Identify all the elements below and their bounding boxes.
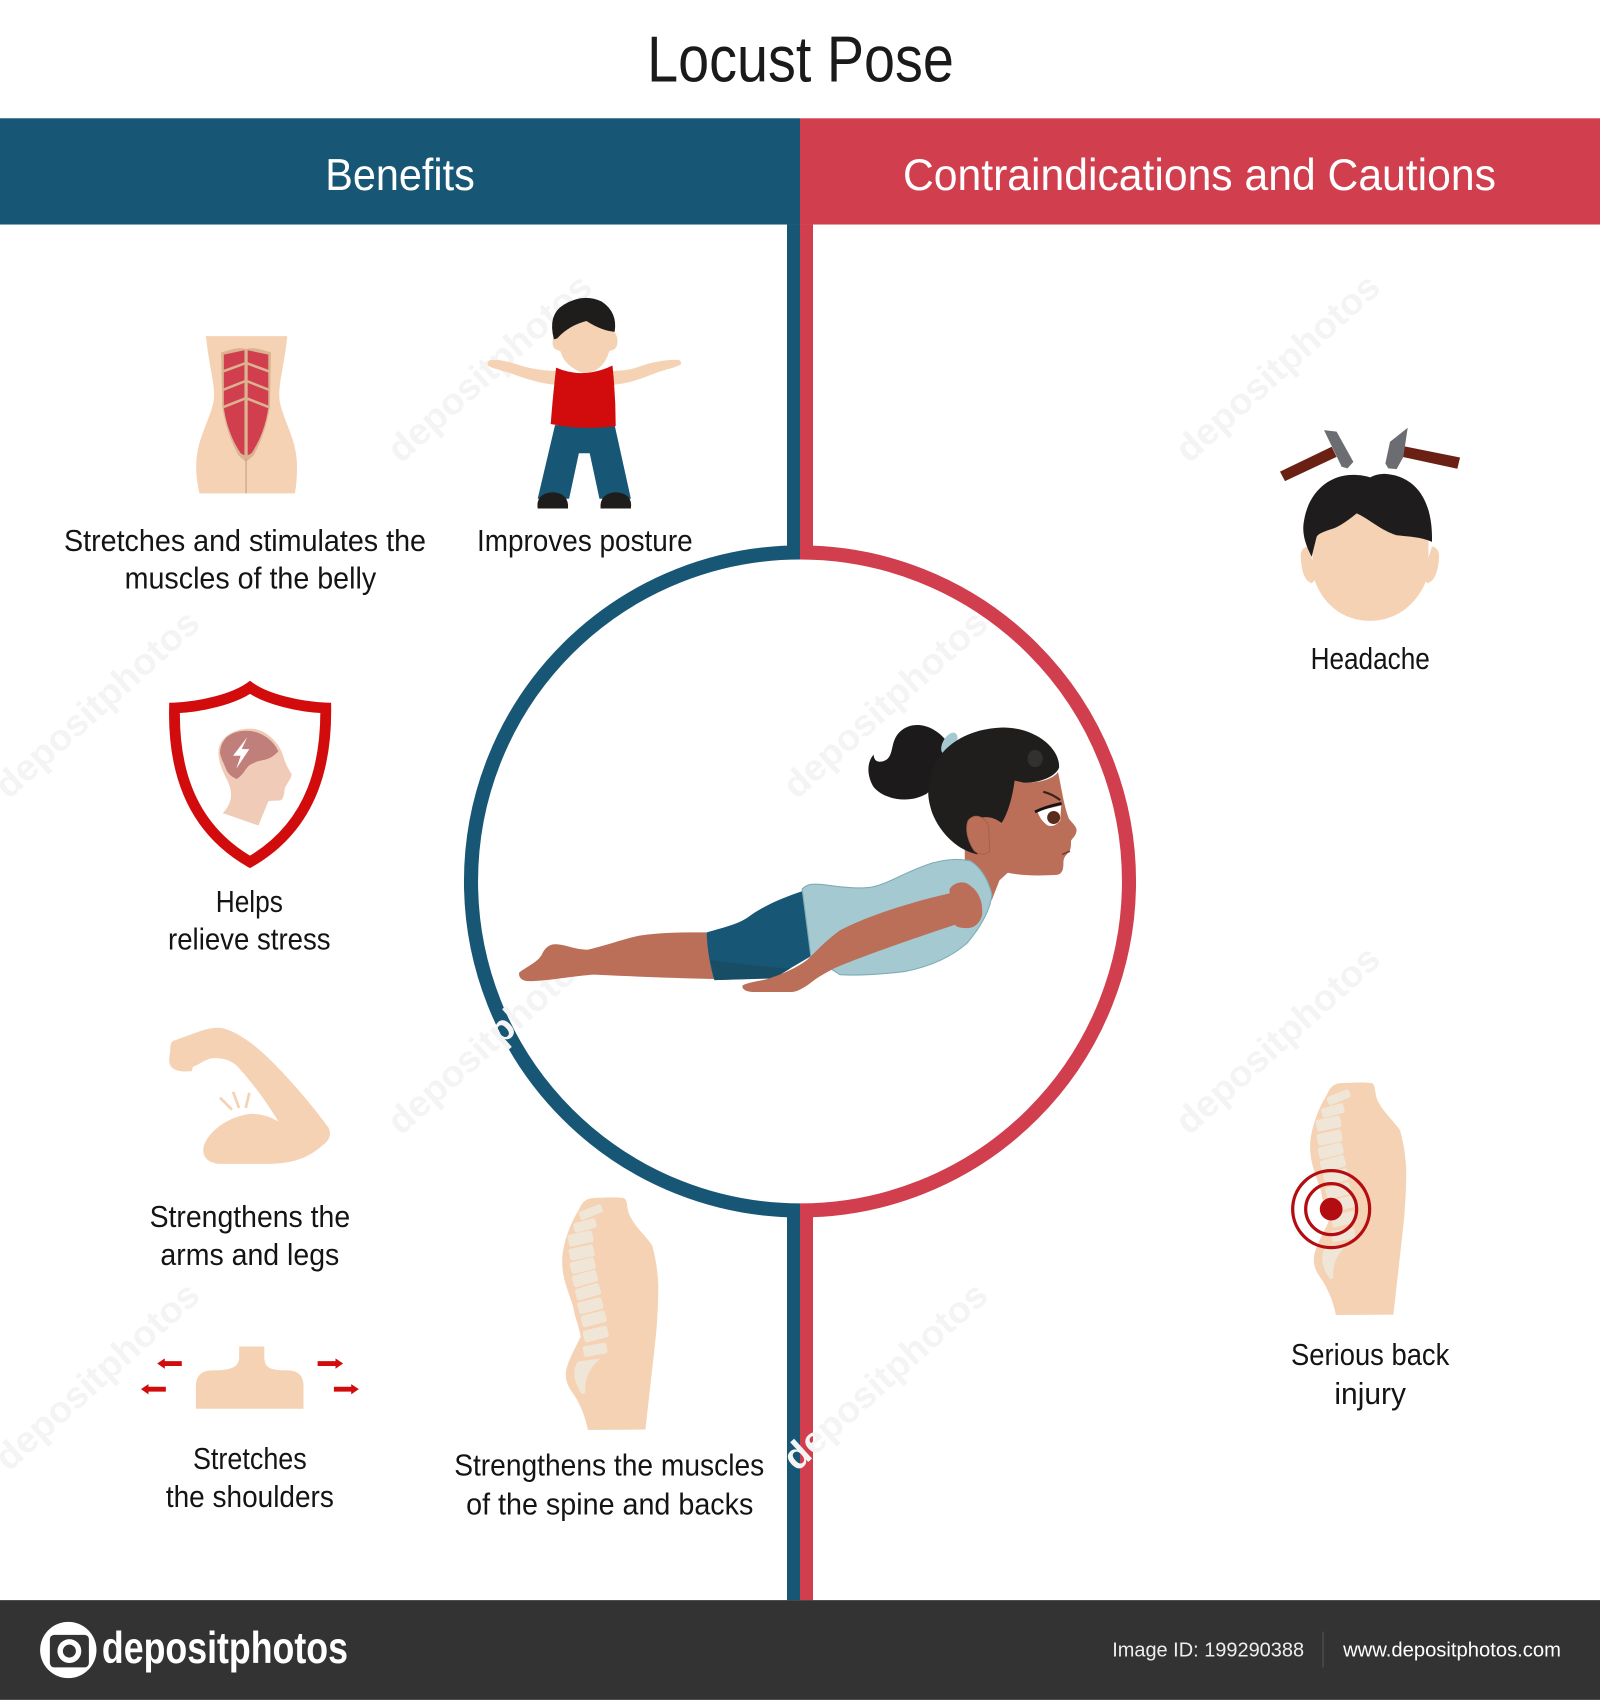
watermark: depositphotos bbox=[775, 602, 995, 806]
watermark: depositphotos bbox=[1167, 938, 1388, 1142]
footer bar bbox=[0, 1600, 1600, 1700]
label: shoulders: Stretches bbox=[193, 1443, 307, 1476]
label: arms and legs bbox=[150, 1201, 350, 1272]
panel header: benefits bbox=[0, 118, 800, 225]
panel header: contraindications and cautions bbox=[800, 118, 1600, 225]
illustration: girl in locust pose bbox=[519, 725, 1077, 992]
image id: Image ID: 199290388 bbox=[1112, 1639, 1304, 1662]
watermark bbox=[0, 265, 1388, 1478]
logo: depositphotos bbox=[40, 1622, 348, 1678]
icon: headache bbox=[1280, 428, 1460, 621]
label: headache: Headache bbox=[1311, 643, 1430, 676]
title: Locust Pose bbox=[647, 22, 954, 95]
label: shoulders bbox=[166, 1443, 334, 1514]
icon: standing boy bbox=[488, 298, 681, 509]
label: stress: relieve stress bbox=[168, 924, 331, 957]
label: belly: muscles of the belly bbox=[125, 563, 377, 596]
icon: shoulders with arrows bbox=[141, 1346, 359, 1409]
label: stress bbox=[168, 886, 331, 957]
watermark: depositphotos bbox=[1167, 265, 1388, 470]
label: spine and backs bbox=[454, 1449, 764, 1521]
website: www.depositphotos.com bbox=[1342, 1639, 1561, 1662]
logo: depositphotos: depositphotos bbox=[102, 1624, 348, 1673]
label: stress: Helps bbox=[216, 886, 283, 919]
icon: abdominal muscles bbox=[196, 336, 297, 493]
label: back injury: Serious back bbox=[1291, 1339, 1450, 1372]
label: belly: Stretches and stimulates the bbox=[64, 525, 426, 558]
label: posture: Improves posture bbox=[477, 525, 693, 558]
label: belly bbox=[64, 525, 426, 596]
label: shoulders: the shoulders bbox=[166, 1481, 334, 1514]
panel header: benefits: Benefits bbox=[325, 151, 475, 200]
watermark: depositphotos bbox=[379, 265, 600, 470]
label: spine and backs: Strengthens the muscles bbox=[454, 1449, 764, 1482]
label: back injury: injury bbox=[1334, 1378, 1407, 1411]
central circle bbox=[470, 552, 1130, 1211]
label: arms and legs: arms and legs bbox=[160, 1239, 339, 1272]
watermark: depositphotos bbox=[379, 938, 600, 1142]
icon: back injury bbox=[1293, 1082, 1406, 1315]
label: back injury bbox=[1291, 1339, 1450, 1411]
watermark: depositphotos bbox=[775, 1274, 995, 1478]
label: arms and legs: Strengthens the bbox=[150, 1201, 350, 1234]
centre divider bbox=[787, 225, 813, 1600]
label: spine and backs: of the spine and backs bbox=[466, 1488, 753, 1521]
icon: spine torso bbox=[562, 1197, 658, 1430]
panel header: contraindications and cautions: Contraindications and Cautions bbox=[903, 151, 1496, 200]
icon: flexed arm bbox=[169, 1028, 330, 1164]
icon: shield with head bbox=[174, 687, 326, 862]
